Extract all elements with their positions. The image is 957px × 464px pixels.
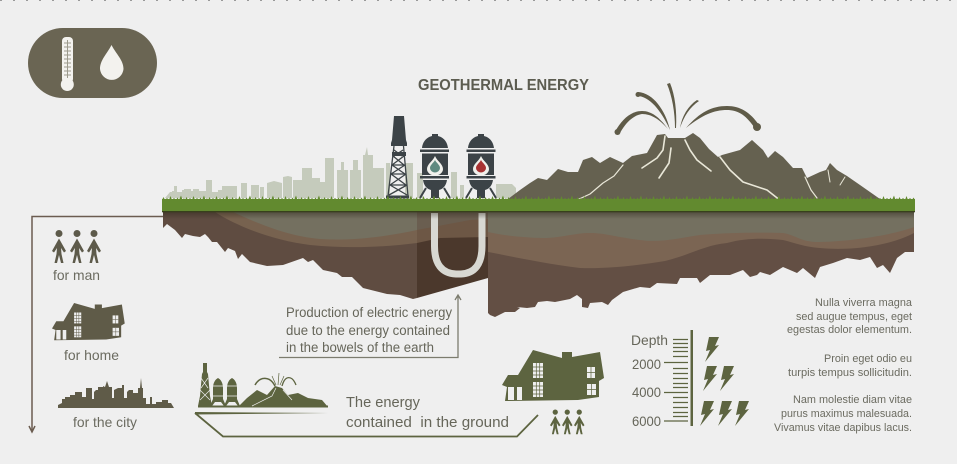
soil cross-section right block [488, 212, 918, 322]
text: the energy contained in the ground: contained in the ground [346, 414, 509, 431]
energy bolts [700, 337, 749, 426]
text block: right notes: purus maximus malesuada. [781, 408, 912, 420]
text block: right notes: Nam molestie diam vitae [793, 394, 912, 406]
label: for man: for man [53, 267, 100, 283]
soil cross-section left block [160, 212, 420, 302]
volcano and mountains [508, 83, 880, 201]
depth scale: 4000 [632, 384, 661, 400]
icon: house [52, 303, 125, 340]
depth scale: Depth [631, 332, 668, 348]
decorative top ticks [0, 0, 957, 2]
icon: olive house [502, 350, 604, 401]
geothermal U pipe [434, 213, 482, 274]
tank with water drop [420, 134, 450, 198]
city skyline background [165, 147, 516, 198]
distribution arrow line [29, 216, 163, 432]
text block: right notes: Proin eget odio eu [824, 353, 912, 365]
text block: right notes: Nulla viverra magna [815, 297, 913, 309]
depth scale [631, 330, 693, 429]
text block: right notes: sed augue tempus, eget [796, 311, 912, 323]
text block: right notes: egestas dolor elementum. [787, 324, 912, 336]
icon: three people [52, 230, 101, 263]
base bracket line [195, 412, 538, 436]
label: for the city: for the city [73, 414, 137, 430]
callout: production of electric energy: due to the energy contained [286, 323, 450, 338]
mini geothermal scene [198, 363, 328, 408]
badge: thermometer and water drop [28, 28, 157, 98]
lava streams [577, 136, 845, 201]
eruption jets [614, 83, 761, 135]
text: the energy contained in the ground: The energy [346, 394, 420, 411]
text block: right notes [774, 297, 913, 434]
text block: right notes: turpis tempus sollicitudin. [788, 367, 912, 379]
soil cross-section dark cut face [417, 212, 488, 298]
depth scale: 2000 [632, 356, 661, 372]
tank with red drop [466, 134, 496, 198]
grass strip [162, 195, 915, 219]
icon: olive people [550, 410, 584, 434]
icon: water drop [100, 45, 124, 80]
arrow [279, 295, 461, 358]
callout: production of electric energy: Production of electric energy [286, 305, 452, 320]
label: for home: for home [64, 347, 119, 363]
icon: thermometer [61, 37, 74, 91]
depth scale: 6000 [632, 413, 661, 429]
title: GEOTHERMAL ENERGY [418, 77, 589, 94]
icon: drilling derrick [386, 116, 409, 198]
text: the energy contained in the ground [346, 394, 509, 431]
callout: production of electric energy [279, 295, 461, 358]
callout: production of electric energy: in the bowels of the earth [286, 340, 434, 355]
text block: right notes: Vivamus vitae dapibus lacus. [774, 422, 912, 434]
icon: city skyline [58, 378, 174, 408]
